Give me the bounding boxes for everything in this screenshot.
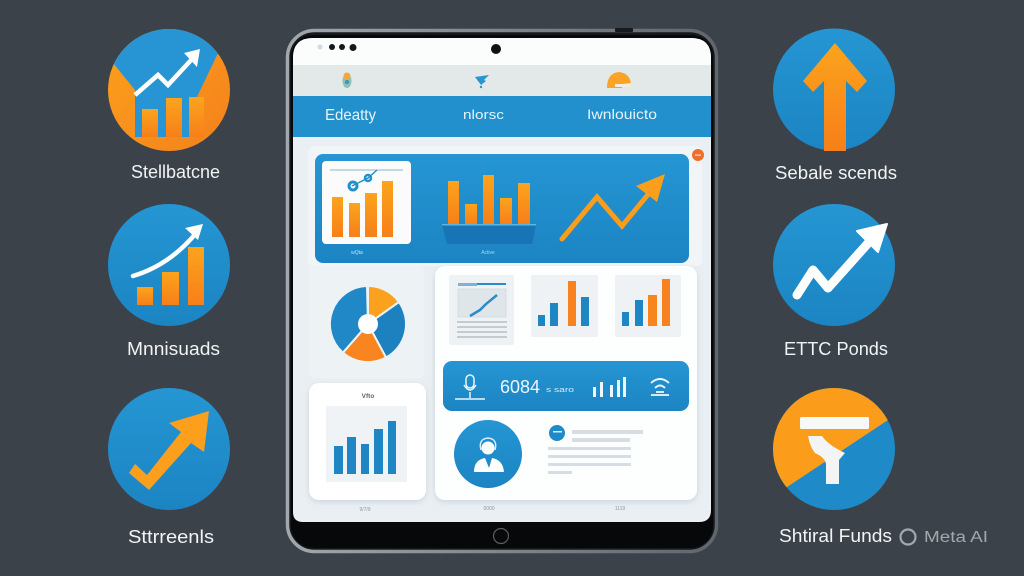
chart caption: wQta — [351, 250, 363, 256]
tablet bezel — [291, 35, 713, 548]
panel: featured charts — [315, 154, 689, 263]
label: ETTC Ponds: ETTC Ponds — [784, 339, 888, 359]
label: Stellbatcne: Stellbatcne — [131, 162, 220, 182]
icon: support agent avatar — [454, 420, 522, 488]
tablet device — [288, 28, 716, 552]
bars on tray — [442, 175, 536, 244]
report thumbnail — [449, 275, 514, 345]
stat value: 6084 — [500, 377, 540, 397]
icon: growth chart on orange and blue circle — [108, 29, 230, 151]
status bar — [293, 38, 711, 65]
icon: orange check arrow — [108, 388, 230, 510]
mini chart 2 — [615, 275, 681, 337]
watermark: Meta AI: Meta AI — [924, 529, 988, 546]
footer caption right: 1119 — [615, 506, 625, 512]
icon: wifi — [651, 379, 669, 395]
navigation bar — [293, 96, 711, 137]
chart card — [322, 161, 411, 244]
tab: nlors: nlorsc — [463, 107, 505, 122]
card footnote: 9/7/9 — [359, 507, 371, 513]
bar chart — [334, 421, 396, 474]
panel: blue bar chart card — [309, 383, 426, 513]
label: Shtiral Funds: Shtiral Funds — [779, 526, 892, 546]
icon: white zigzag arrow — [773, 204, 895, 326]
home button — [494, 528, 508, 544]
stat unit: s saro — [546, 387, 574, 394]
label: Sebale scends: Sebale scends — [775, 163, 897, 183]
icon: signal bars — [593, 377, 626, 397]
tab: Edeatty: Edeatty — [325, 107, 376, 124]
label: Mnnisuads: Mnnisuads — [127, 339, 220, 359]
icon: microphone — [455, 375, 485, 399]
tab: Iwnlouicto: Iwnlouicto — [587, 106, 657, 122]
content backing card — [308, 146, 702, 266]
trend arrow — [562, 174, 665, 239]
icon: funnel on split circle — [770, 385, 900, 510]
panel: pie chart — [309, 266, 424, 378]
chart area — [326, 406, 407, 482]
icon strip — [293, 65, 711, 96]
top hardware button — [615, 28, 633, 32]
tablet frame — [288, 30, 716, 552]
mini chart 1 — [531, 275, 598, 337]
watermark: Meta AI — [900, 529, 988, 546]
pie chart — [330, 286, 406, 362]
tray caption: Active — [481, 250, 495, 256]
label: Sttrreenls: Sttrreenls — [128, 527, 214, 547]
footer caption left: 0000 — [483, 506, 495, 512]
icon: rising bars with curved arrow — [108, 204, 230, 326]
icon: up arrow — [773, 28, 895, 151]
icon: blue wifi — [475, 75, 489, 88]
profile text lines — [548, 425, 643, 474]
icon: multicolour badge — [342, 72, 352, 88]
tablet screen — [293, 38, 711, 522]
card title: Vfto — [362, 393, 374, 400]
panel: right dashboard card — [435, 266, 697, 500]
notification dot — [692, 149, 704, 161]
stat banner — [443, 361, 689, 411]
icon: orange sun — [607, 72, 631, 88]
